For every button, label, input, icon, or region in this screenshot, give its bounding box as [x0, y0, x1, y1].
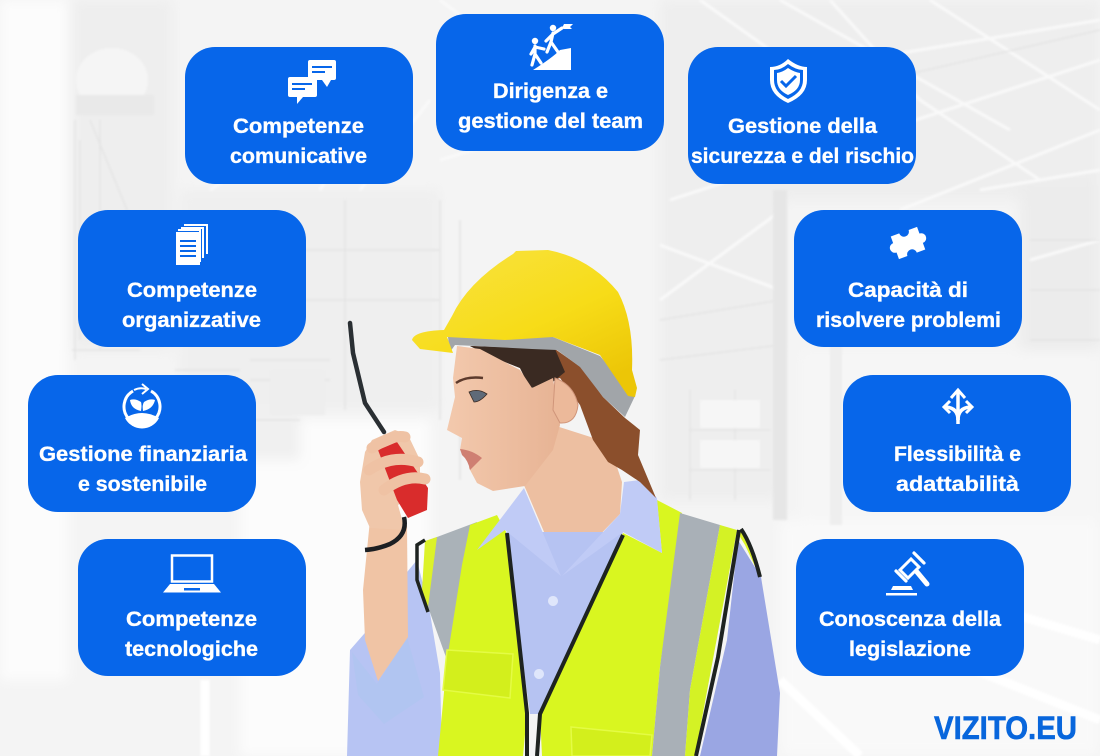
vest yellow band [685, 525, 737, 756]
icon: stacked documents [176, 224, 208, 265]
card: Gestione della sicurezza e del rischio [688, 47, 916, 184]
label [816, 279, 1001, 332]
label [122, 279, 261, 332]
vest left shoulder [422, 522, 477, 660]
label: adattabilità [896, 473, 1019, 496]
label: tecnologiche [125, 638, 258, 661]
logo: VIZITO.EU: VIZITO.EU [934, 710, 1077, 746]
label: Dirigenza e [493, 80, 608, 103]
card: Dirigenza e gestione del team [436, 14, 664, 151]
card: Capacità di risolvere problemi [794, 210, 1022, 347]
radio body [378, 442, 428, 518]
helmet [412, 250, 637, 397]
forearm [363, 520, 408, 681]
label: Competenze [233, 115, 364, 138]
label: risolvere problemi [816, 309, 1001, 332]
right sleeve [700, 540, 780, 756]
ear [553, 378, 578, 423]
wrist strap [365, 517, 405, 550]
left collar [477, 488, 561, 576]
icon: shield with check [770, 59, 807, 103]
vest front left panel [438, 515, 527, 756]
brow and eye [456, 378, 483, 383]
shirt front [505, 532, 623, 714]
card: Competenze tecnologiche [78, 539, 306, 676]
label: sicurezza e del rischio [691, 145, 914, 168]
label [458, 80, 643, 133]
left sleeve [347, 560, 442, 756]
label: comunicative [230, 145, 367, 168]
label [39, 443, 247, 496]
icon: branching arrows [944, 390, 972, 424]
icon: plant in recycling ring [124, 384, 160, 429]
label: Capacità di [848, 279, 968, 302]
hair and braid [470, 346, 656, 498]
lips [460, 449, 482, 470]
vest front right panel [540, 500, 682, 756]
vest pockets [443, 650, 652, 756]
vest yellow edge [422, 537, 437, 607]
vest back edge [737, 530, 760, 577]
cuff [352, 637, 424, 724]
face [447, 346, 560, 491]
hand [360, 430, 420, 530]
icon: gavel [886, 553, 927, 596]
label [230, 115, 367, 168]
dark hair [470, 346, 565, 388]
right collar [562, 480, 662, 576]
radio antenna [350, 323, 384, 432]
label: Flessibilità e [894, 443, 1021, 466]
label: Competenze [126, 608, 257, 631]
icon: speech bubbles [288, 60, 336, 104]
label: legislazione [849, 638, 971, 661]
card: Flessibilità e adattabilità [843, 375, 1071, 512]
neck [523, 425, 622, 574]
label: Gestione finanziaria [39, 443, 247, 466]
label: gestione del team [458, 110, 643, 133]
label [894, 443, 1021, 496]
label [691, 115, 914, 168]
vest trims [507, 529, 760, 756]
label: Competenze [127, 279, 257, 302]
label [819, 608, 1001, 661]
fingers [369, 436, 425, 490]
icon: laptop [163, 556, 221, 592]
card: Competenze comunicative [185, 47, 413, 184]
label: e sostenibile [78, 473, 207, 496]
vest left trim [417, 540, 428, 612]
icon: climbers with flag [531, 24, 573, 70]
shirt buttons [534, 596, 558, 679]
card: Conoscenza della legislazione [796, 539, 1024, 676]
icon: puzzle piece [886, 225, 930, 261]
person: worker with helmet and radio [347, 250, 780, 756]
label [125, 608, 258, 661]
card: Competenze organizzative [78, 210, 306, 347]
card: Gestione finanziaria e sostenibile [28, 375, 256, 512]
label: Conoscenza della [819, 608, 1001, 631]
label: Gestione della [728, 115, 877, 138]
helmet strap band [448, 337, 635, 417]
vest reflective stripe [652, 513, 720, 756]
label: organizzative [122, 309, 261, 332]
